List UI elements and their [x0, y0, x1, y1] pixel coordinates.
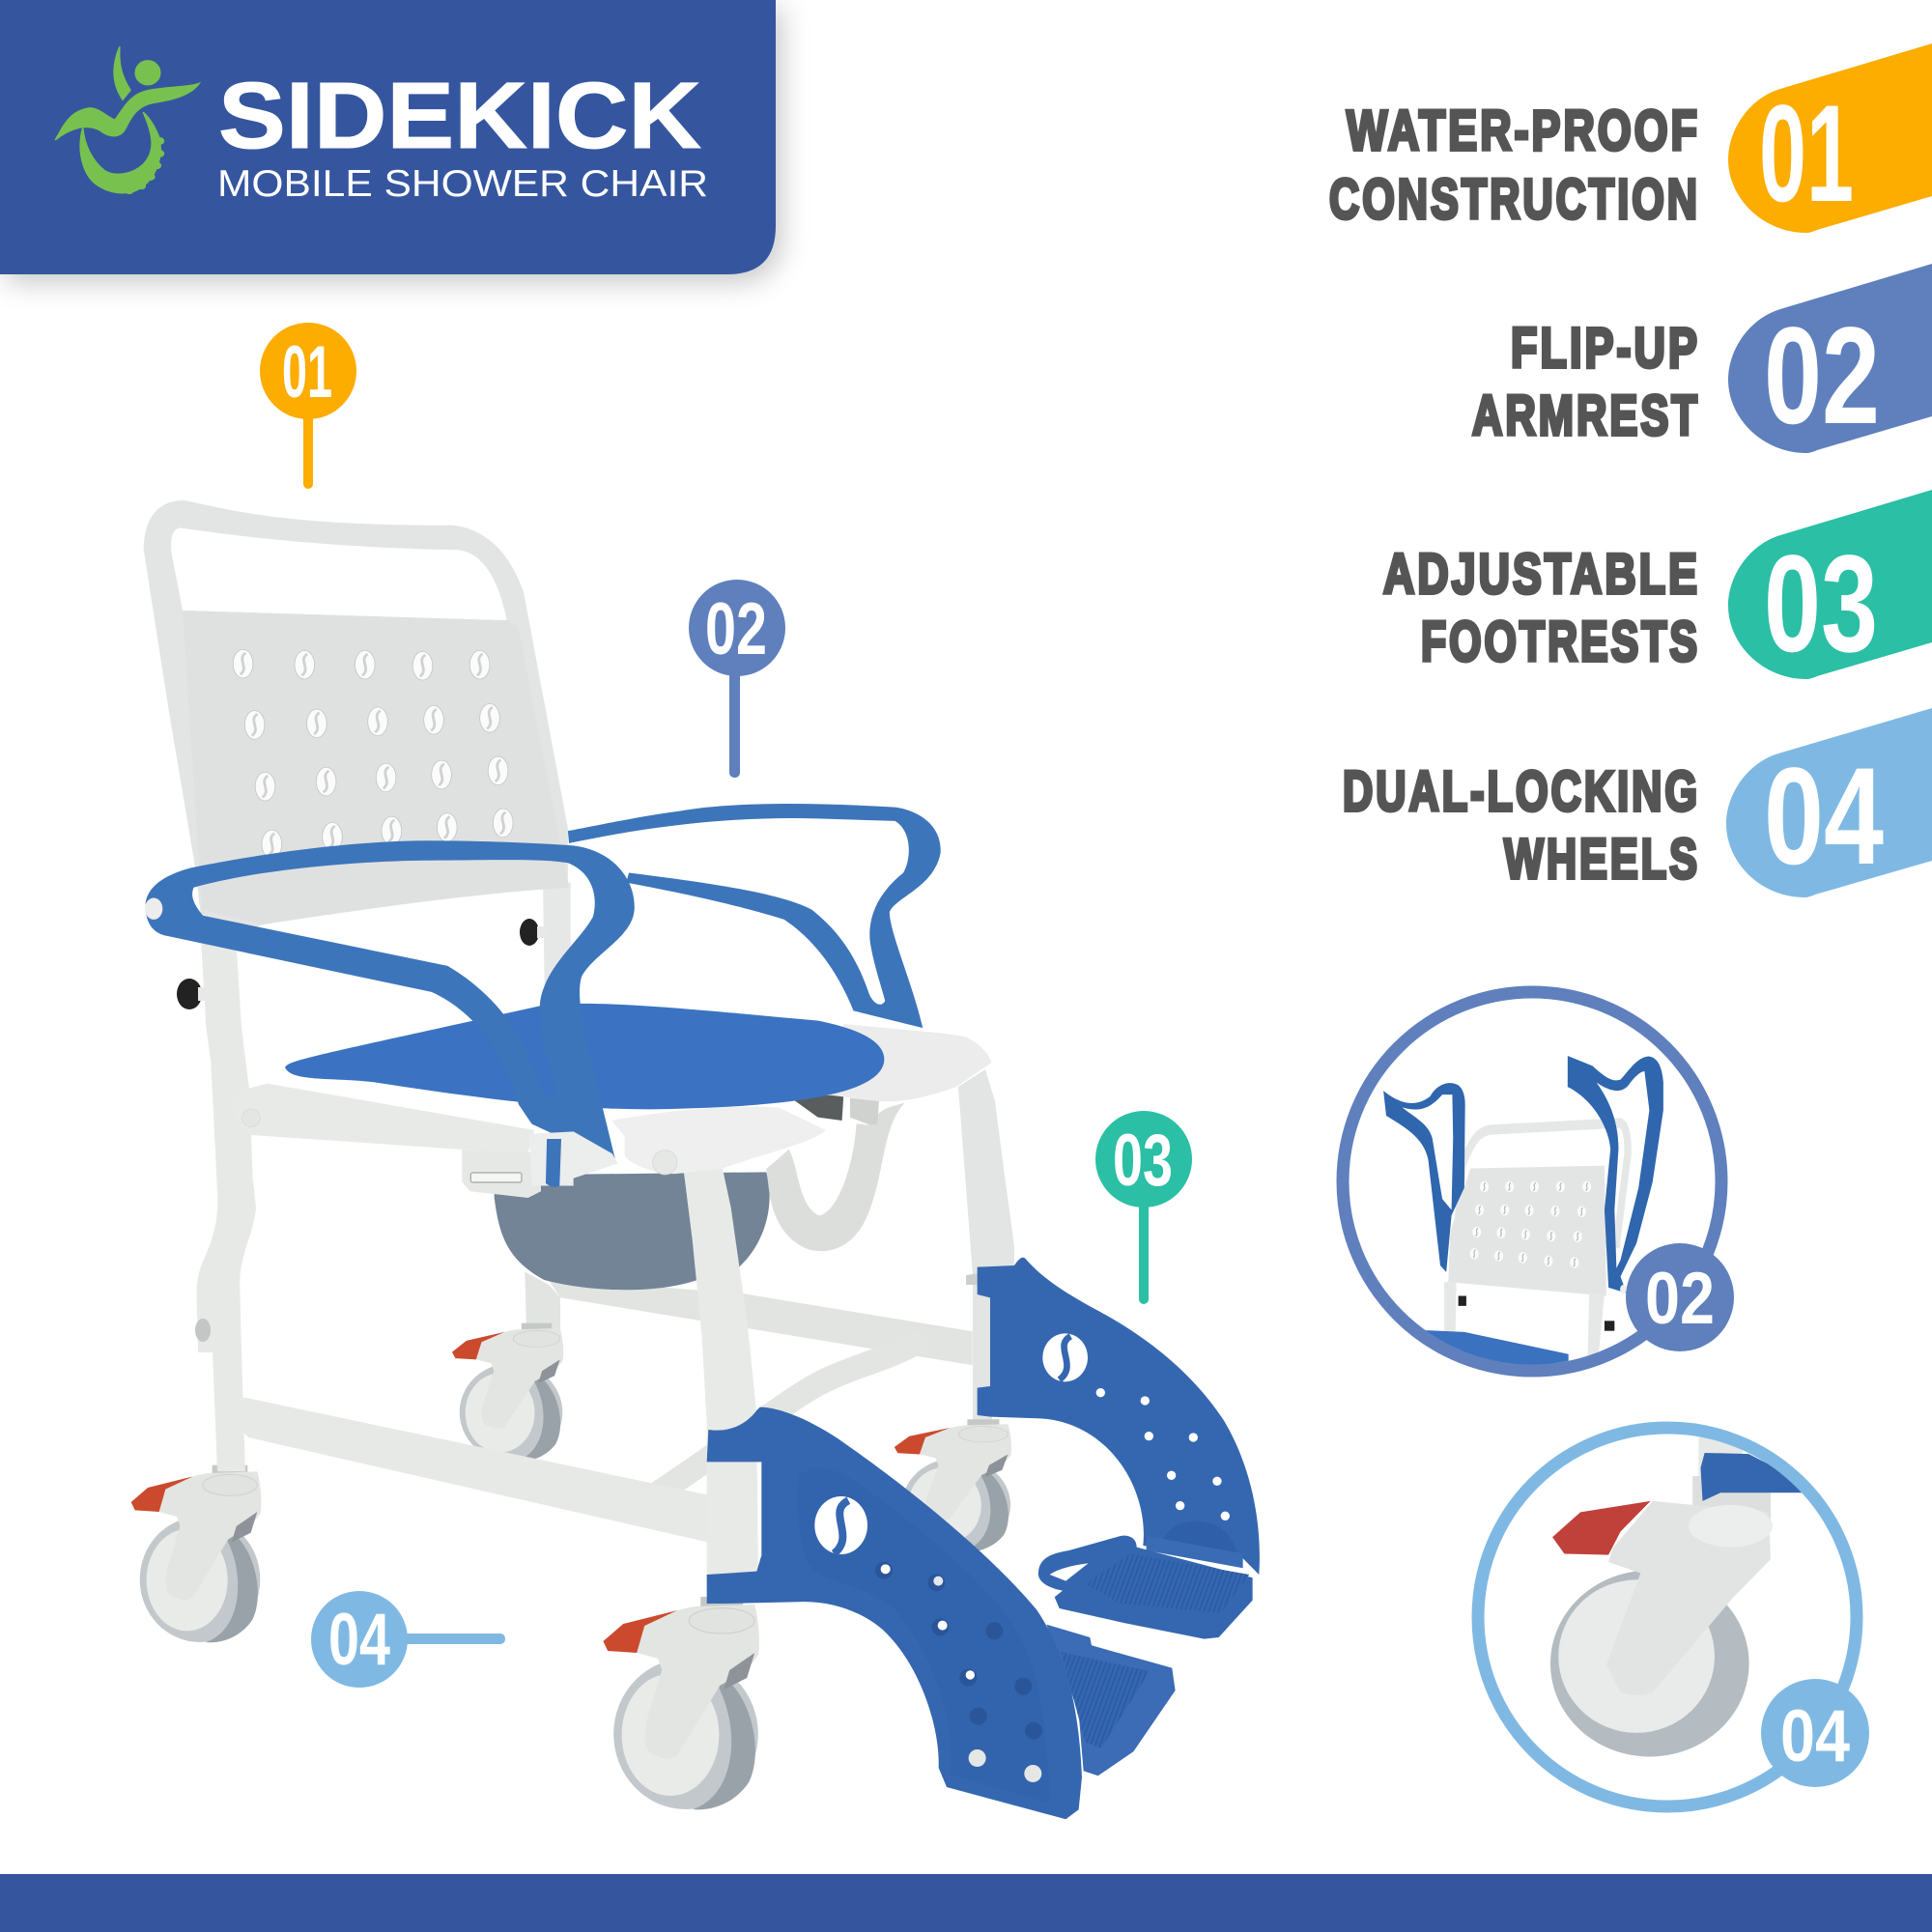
far-left leg	[525, 1272, 560, 1331]
callout 03: 03	[1113, 1120, 1173, 1202]
callout 04	[311, 1591, 505, 1688]
diagonal brace	[657, 1343, 916, 1494]
feature 01: water-proof construction: CONSTRUCTION	[1329, 168, 1700, 231]
chair lower frame	[131, 944, 1260, 1819]
feature 04: dual-locking wheels	[1343, 708, 1932, 897]
far footrest	[966, 1258, 1260, 1639]
callout 03	[1095, 1111, 1192, 1304]
callout 02: 02	[705, 588, 767, 670]
feature 03: adjustable footrests: 03	[1764, 527, 1878, 681]
header panel	[0, 0, 776, 274]
near-left wheel	[131, 1465, 261, 1642]
far-right wheel	[895, 1419, 1011, 1552]
subtitle: MOBILE SHOWER CHAIR	[217, 163, 708, 205]
height adjust knobs	[177, 919, 547, 1009]
callout 01: 01	[282, 331, 332, 413]
far-left wheel	[452, 1323, 563, 1462]
feature 01: water-proof construction: WATER-PROOF	[1347, 99, 1700, 162]
backrest frame and panel	[144, 500, 569, 947]
feature 04: dual-locking wheels: WHEELS	[1504, 828, 1700, 891]
feature 02: flip-up armrest: 02	[1764, 299, 1880, 453]
front wheel	[603, 1597, 759, 1809]
far-right leg	[958, 1069, 1014, 1420]
icon: sidekick logo	[55, 46, 199, 194]
inset badge 04	[1761, 1679, 1869, 1787]
seat frame bar	[232, 1084, 541, 1198]
rear upright behind arm	[543, 883, 571, 996]
front leg	[683, 1162, 758, 1584]
near footrest	[707, 1407, 1176, 1819]
seat rear section	[611, 1024, 992, 1175]
feature 01: water-proof construction: 01	[1759, 77, 1854, 231]
feature 03: adjustable footrests: FOOTRESTS	[1421, 611, 1700, 673]
bottom bar	[0, 1874, 1932, 1932]
feature 02: flip-up armrest: ARMREST	[1472, 384, 1700, 447]
callout 01	[260, 323, 356, 489]
seat and armrests	[145, 804, 941, 1187]
title: SIDEKICK	[218, 63, 701, 168]
left rear tube	[197, 944, 256, 1471]
bucket	[495, 1172, 770, 1290]
callout 04: 04	[328, 1599, 390, 1681]
feature 04: dual-locking wheels: DUAL-LOCKING	[1343, 760, 1700, 823]
inset badge 02	[1626, 1243, 1734, 1351]
U-tube	[766, 1103, 905, 1251]
seat	[285, 1004, 884, 1109]
chair upper: backrest and armrests	[144, 500, 571, 996]
far crossbar	[548, 1278, 973, 1365]
inset: wheel detail	[1478, 1428, 1857, 1806]
inset badge 02: 02	[1645, 1258, 1715, 1340]
inset: armrest detail	[1343, 992, 1721, 1379]
near armrest	[146, 840, 635, 1158]
far armrest	[568, 804, 941, 1028]
feature 04: dual-locking wheels: 04	[1764, 740, 1884, 894]
near crossbar	[232, 1396, 710, 1543]
feature 02: flip-up armrest: FLIP-UP	[1511, 317, 1700, 380]
armrest latch	[529, 1131, 618, 1185]
callout 02	[689, 580, 785, 778]
feature 03: adjustable footrests	[1383, 490, 1932, 681]
feature 02: flip-up armrest	[1472, 264, 1932, 453]
inset badge 04: 04	[1780, 1695, 1850, 1777]
feature 03: adjustable footrests: ADJUSTABLE	[1383, 543, 1700, 606]
feature 01: water-proof construction	[1329, 43, 1932, 233]
